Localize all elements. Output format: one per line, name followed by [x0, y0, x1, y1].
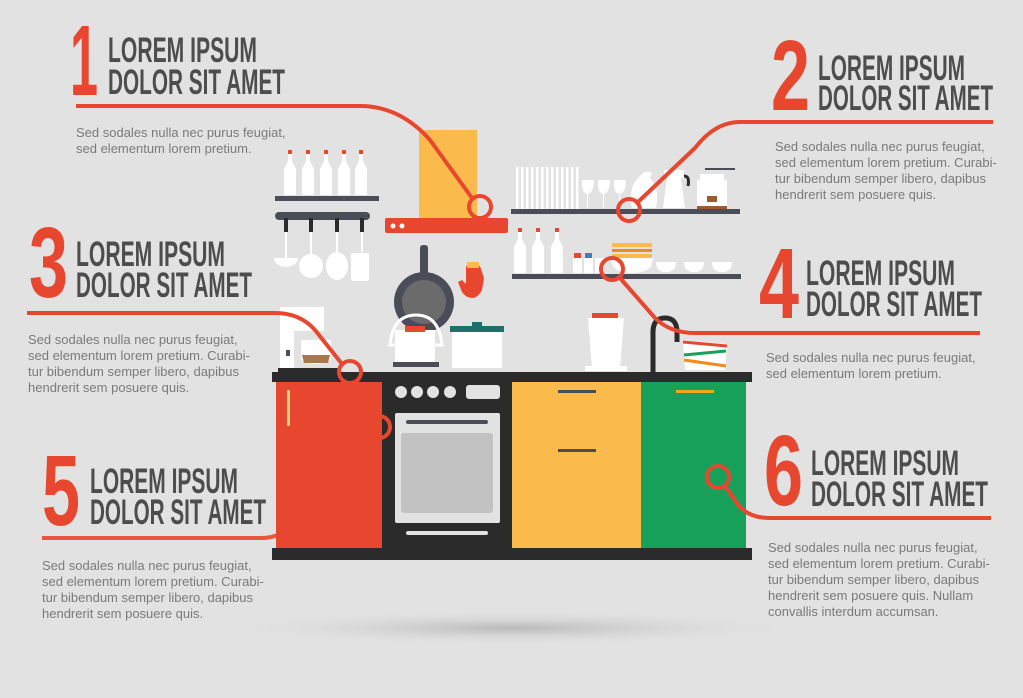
countertop — [272, 372, 752, 382]
section 6: 6 — [764, 415, 803, 527]
section 1: LOREM IPSUM — [108, 31, 257, 70]
coffee maker — [278, 307, 338, 372]
section 5: LOREM IPSUM — [90, 462, 238, 501]
base strip — [272, 548, 752, 560]
section 5: tur bibendum semper libero, dapibus — [42, 590, 254, 605]
section 6 — [764, 415, 990, 619]
plate stack — [683, 340, 727, 370]
section 5: hendrerit sem posuere quis. — [42, 606, 203, 621]
section 5: 5 — [42, 435, 80, 547]
section 6: sed elementum lorem pretium. Curabi- — [768, 556, 990, 571]
section 3: 3 — [29, 207, 68, 319]
pot — [450, 322, 504, 368]
section 3: sed elementum lorem pretium. Curabi- — [28, 348, 250, 363]
section 1: 1 — [70, 5, 98, 117]
section 1: Sed sodales nulla nec purus feugiat, — [76, 125, 286, 140]
oven mitt — [458, 262, 484, 298]
floor shadow — [212, 610, 812, 646]
section 6: convallis interdum accumsan. — [768, 604, 939, 619]
faucet — [653, 318, 677, 372]
yellow cabinet — [512, 382, 641, 548]
section 6: tur bibendum semper libero, dapibus — [768, 572, 980, 587]
section 5 — [42, 435, 266, 621]
section 1 — [70, 5, 286, 156]
section 3: hendrerit sem posuere quis. — [28, 380, 189, 395]
section 5: DOLOR SIT AMET — [90, 493, 266, 532]
water kettle — [585, 313, 627, 371]
section 3: LOREM IPSUM — [76, 235, 225, 274]
section 3 — [28, 207, 252, 395]
section 4: 4 — [759, 228, 799, 340]
section 3: Sed sodales nulla nec purus feugiat, — [28, 332, 238, 347]
utensil rail — [274, 212, 370, 281]
section 5: Sed sodales nulla nec purus feugiat, — [42, 558, 252, 573]
kitchen illustration — [272, 130, 752, 560]
range hood — [385, 130, 508, 233]
green cabinet — [641, 382, 746, 548]
connector lines — [27, 106, 993, 538]
frying pan — [394, 245, 454, 332]
section 5: sed elementum lorem pretium. Curabi- — [42, 574, 264, 589]
stove — [382, 382, 512, 548]
section 2: Sed sodales nulla nec purus feugiat, — [775, 139, 985, 154]
kettle — [390, 315, 442, 367]
section 1: sed elementum lorem pretium. — [76, 141, 252, 156]
section 1: DOLOR SIT AMET — [108, 63, 285, 102]
red cabinet — [276, 382, 382, 548]
section 2: 2 — [771, 20, 810, 132]
section 6: Sed sodales nulla nec purus feugiat, — [768, 540, 978, 555]
section 2 — [771, 20, 997, 202]
middle right shelf — [512, 228, 741, 279]
section 2: tur bibendum semper libero, dapibus — [775, 171, 987, 186]
section 2: hendrerit sem posuere quis. — [775, 187, 936, 202]
section 4: sed elementum lorem pretium. — [766, 366, 942, 381]
section 3: tur bibendum semper libero, dapibus — [28, 364, 240, 379]
section 2: sed elementum lorem pretium. Curabi- — [775, 155, 997, 170]
section 3: DOLOR SIT AMET — [76, 266, 252, 305]
section 4: Sed sodales nulla nec purus feugiat, — [766, 350, 976, 365]
bottle shelf — [275, 150, 379, 201]
top right shelf — [511, 167, 740, 214]
section 6: hendrerit sem posuere quis. Nullam — [768, 588, 973, 603]
section 4 — [759, 228, 982, 381]
